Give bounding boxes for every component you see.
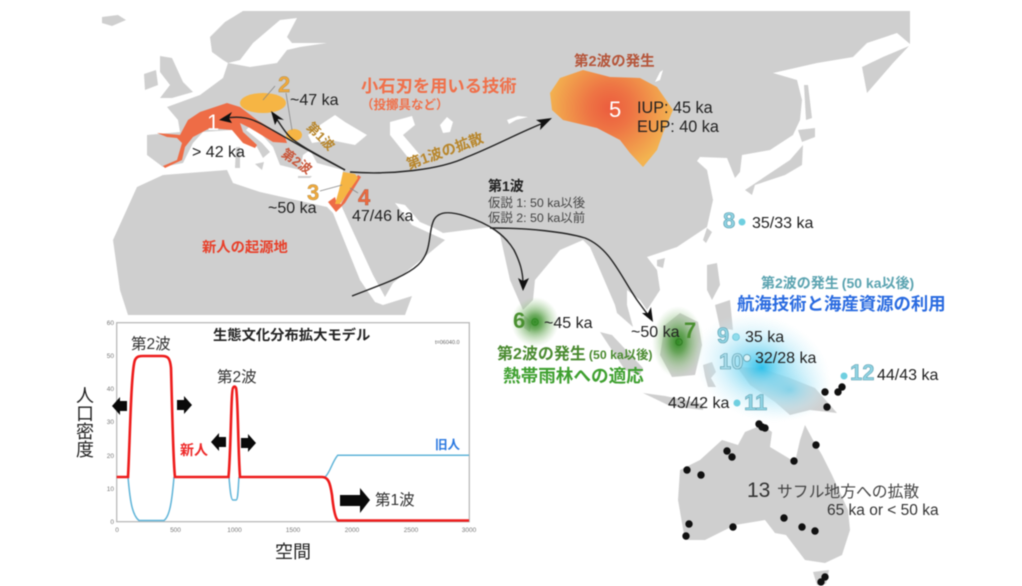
arrow: first wave to India [352, 213, 529, 296]
region 3 and 4: Levant [328, 172, 361, 212]
chart frame [117, 323, 469, 522]
label: Sahul dispersal [747, 479, 939, 519]
heading: microblade technology: 小石刃を用いる技術 [361, 76, 517, 96]
heading: maritime second wave: 航海技術と海産資源の利用 [737, 294, 946, 314]
label: 47/46 ka: 47/46 ka [352, 208, 413, 225]
heading: microblade technology [361, 76, 517, 112]
label: 50 ka: ~50 ka [268, 200, 317, 217]
region 5 labels: EUP: 40 ka [637, 118, 719, 136]
arrow: to region 2 [271, 111, 345, 170]
arrow: first wave to Sunda [490, 228, 653, 322]
y axis label: 人 [76, 386, 94, 406]
maritime glow [678, 295, 846, 441]
site 10: 32/28 ka [755, 350, 816, 367]
arrow: first wave front [340, 488, 370, 513]
site 12: 44/43 ka [877, 367, 938, 384]
site 8: 35/33 ka [752, 215, 813, 232]
number 4: 4 [358, 185, 371, 210]
site 6: 6 [513, 308, 525, 333]
arrow: left of first peak [112, 397, 127, 415]
text block: first wave hypotheses [488, 178, 586, 225]
y axis label [76, 386, 94, 460]
label: 47 ka: ~47 ka [290, 92, 339, 109]
site markers: black dots [682, 383, 846, 586]
label: greater than 42 ka: > 42 ka [192, 144, 245, 161]
x axis label: 空間 [275, 542, 311, 562]
heading: rainforest second wave [497, 344, 652, 386]
axis tick labels: 500 [170, 527, 181, 534]
line: archaic humans [128, 455, 469, 520]
region 7 glow [652, 306, 704, 378]
label: Sahul dispersal: 13 [747, 479, 770, 502]
leader lines [263, 86, 358, 193]
site 10: 10 [719, 349, 743, 374]
label: first wave rotated: 第1波 [304, 119, 338, 153]
text block: first wave hypotheses: 仮説 1: 50 ka以後 [488, 195, 586, 210]
time stamp: t=06040.0 [435, 340, 460, 346]
text block: first wave hypotheses: 仮説 2: 50 ka以前 [488, 210, 585, 225]
label: second wave 2: 第2波 [217, 368, 257, 386]
site 7: ~50 ka [631, 324, 680, 341]
number 2: 2 [278, 72, 290, 97]
label: second wave 1: 第2波 [131, 335, 171, 353]
label: Sahul dispersal: 65 ka or < 50 ka [827, 502, 939, 519]
region 6 glow [511, 297, 559, 347]
axis tick labels: 50 [107, 353, 114, 360]
arrow: right of second peak [241, 434, 256, 452]
axis tick labels: 1500 [286, 527, 301, 534]
region 2: central Europe [240, 93, 302, 141]
axis tick labels: 0 [110, 519, 114, 526]
arrow: left of second peak [211, 433, 226, 451]
label: modern humans: 新人 [180, 442, 208, 458]
axis tick labels: 2000 [345, 527, 360, 534]
y axis label: 密 [76, 422, 94, 442]
number 1: 1 [207, 110, 219, 135]
site 11: 11 [744, 390, 767, 415]
axis tick labels: 40 [107, 386, 114, 393]
site 8 [723, 208, 813, 233]
site 11 [668, 390, 767, 415]
heading: maritime second wave [737, 275, 946, 314]
axis tick labels: 10 [107, 486, 114, 493]
site 6: ~45 ka [544, 315, 593, 332]
axis tick labels: 1000 [227, 527, 242, 534]
label: origin of modern humans: 新人の起源地 [202, 239, 288, 256]
site 6 [513, 308, 593, 333]
region 5 labels: IUP: 45 ka [637, 99, 713, 117]
label: first wave dispersal: 第1波の拡散 [404, 129, 486, 173]
world map base [102, 11, 910, 585]
region 5 labels [609, 97, 719, 136]
label: second wave origin north: 第2波の発生 [574, 52, 655, 70]
arrow: first wave dispersal [350, 118, 552, 173]
arrow: to region 1 [219, 112, 345, 170]
seas and lakes [228, 18, 663, 160]
site 9 [717, 323, 784, 348]
axis tick labels: 30 [107, 419, 114, 426]
number 3: 3 [307, 180, 319, 205]
y axis label: 口 [76, 404, 94, 424]
axis tick labels: 60 [107, 320, 114, 327]
text block: first wave hypotheses: 第1波 [488, 178, 524, 194]
axis tick labels [107, 320, 477, 534]
region 5: Siberia [550, 70, 673, 167]
line: modern humans [117, 356, 469, 520]
site 12: 12 [850, 360, 874, 385]
site 11: 43/42 ka [668, 395, 729, 412]
label: first wave: 第1波 [375, 491, 415, 509]
arrow: right of first peak [177, 396, 192, 414]
axis tick labels: 3000 [462, 527, 477, 534]
axis tick labels: 0 [115, 527, 119, 534]
region 5 labels: 5 [609, 97, 621, 122]
site 8: 8 [723, 208, 735, 233]
heading: rainforest second wave: 熱帯雨林への適応 [503, 366, 644, 386]
site 9: 35 ka [745, 329, 784, 346]
site 10 [719, 349, 816, 374]
chart title: 生態文化分布拡大モデル [213, 326, 370, 344]
site 7 [631, 318, 696, 345]
site 12 [840, 360, 938, 385]
site 7: 7 [684, 318, 696, 343]
axis tick labels: 20 [107, 453, 114, 460]
label: archaic humans: 旧人 [435, 438, 461, 452]
heading: rainforest second wave: 第2波の発生(50 ka以後) [497, 344, 652, 363]
site 9: 9 [717, 323, 729, 348]
heading: microblade technology: （投擲具など） [361, 97, 449, 112]
label: second wave rotated: 第2波 [279, 146, 315, 177]
panel: ecological-cultural distribution expansion model [76, 320, 477, 562]
heading: maritime second wave: 第2波の発生(50 ka以後) [761, 275, 914, 291]
region 1: Europe [157, 103, 287, 168]
y axis label: 度 [76, 440, 94, 460]
label: Sahul dispersal: サフル地方への拡散 [777, 483, 919, 501]
axis tick labels: 2500 [404, 527, 419, 534]
map labels: west [192, 72, 413, 225]
